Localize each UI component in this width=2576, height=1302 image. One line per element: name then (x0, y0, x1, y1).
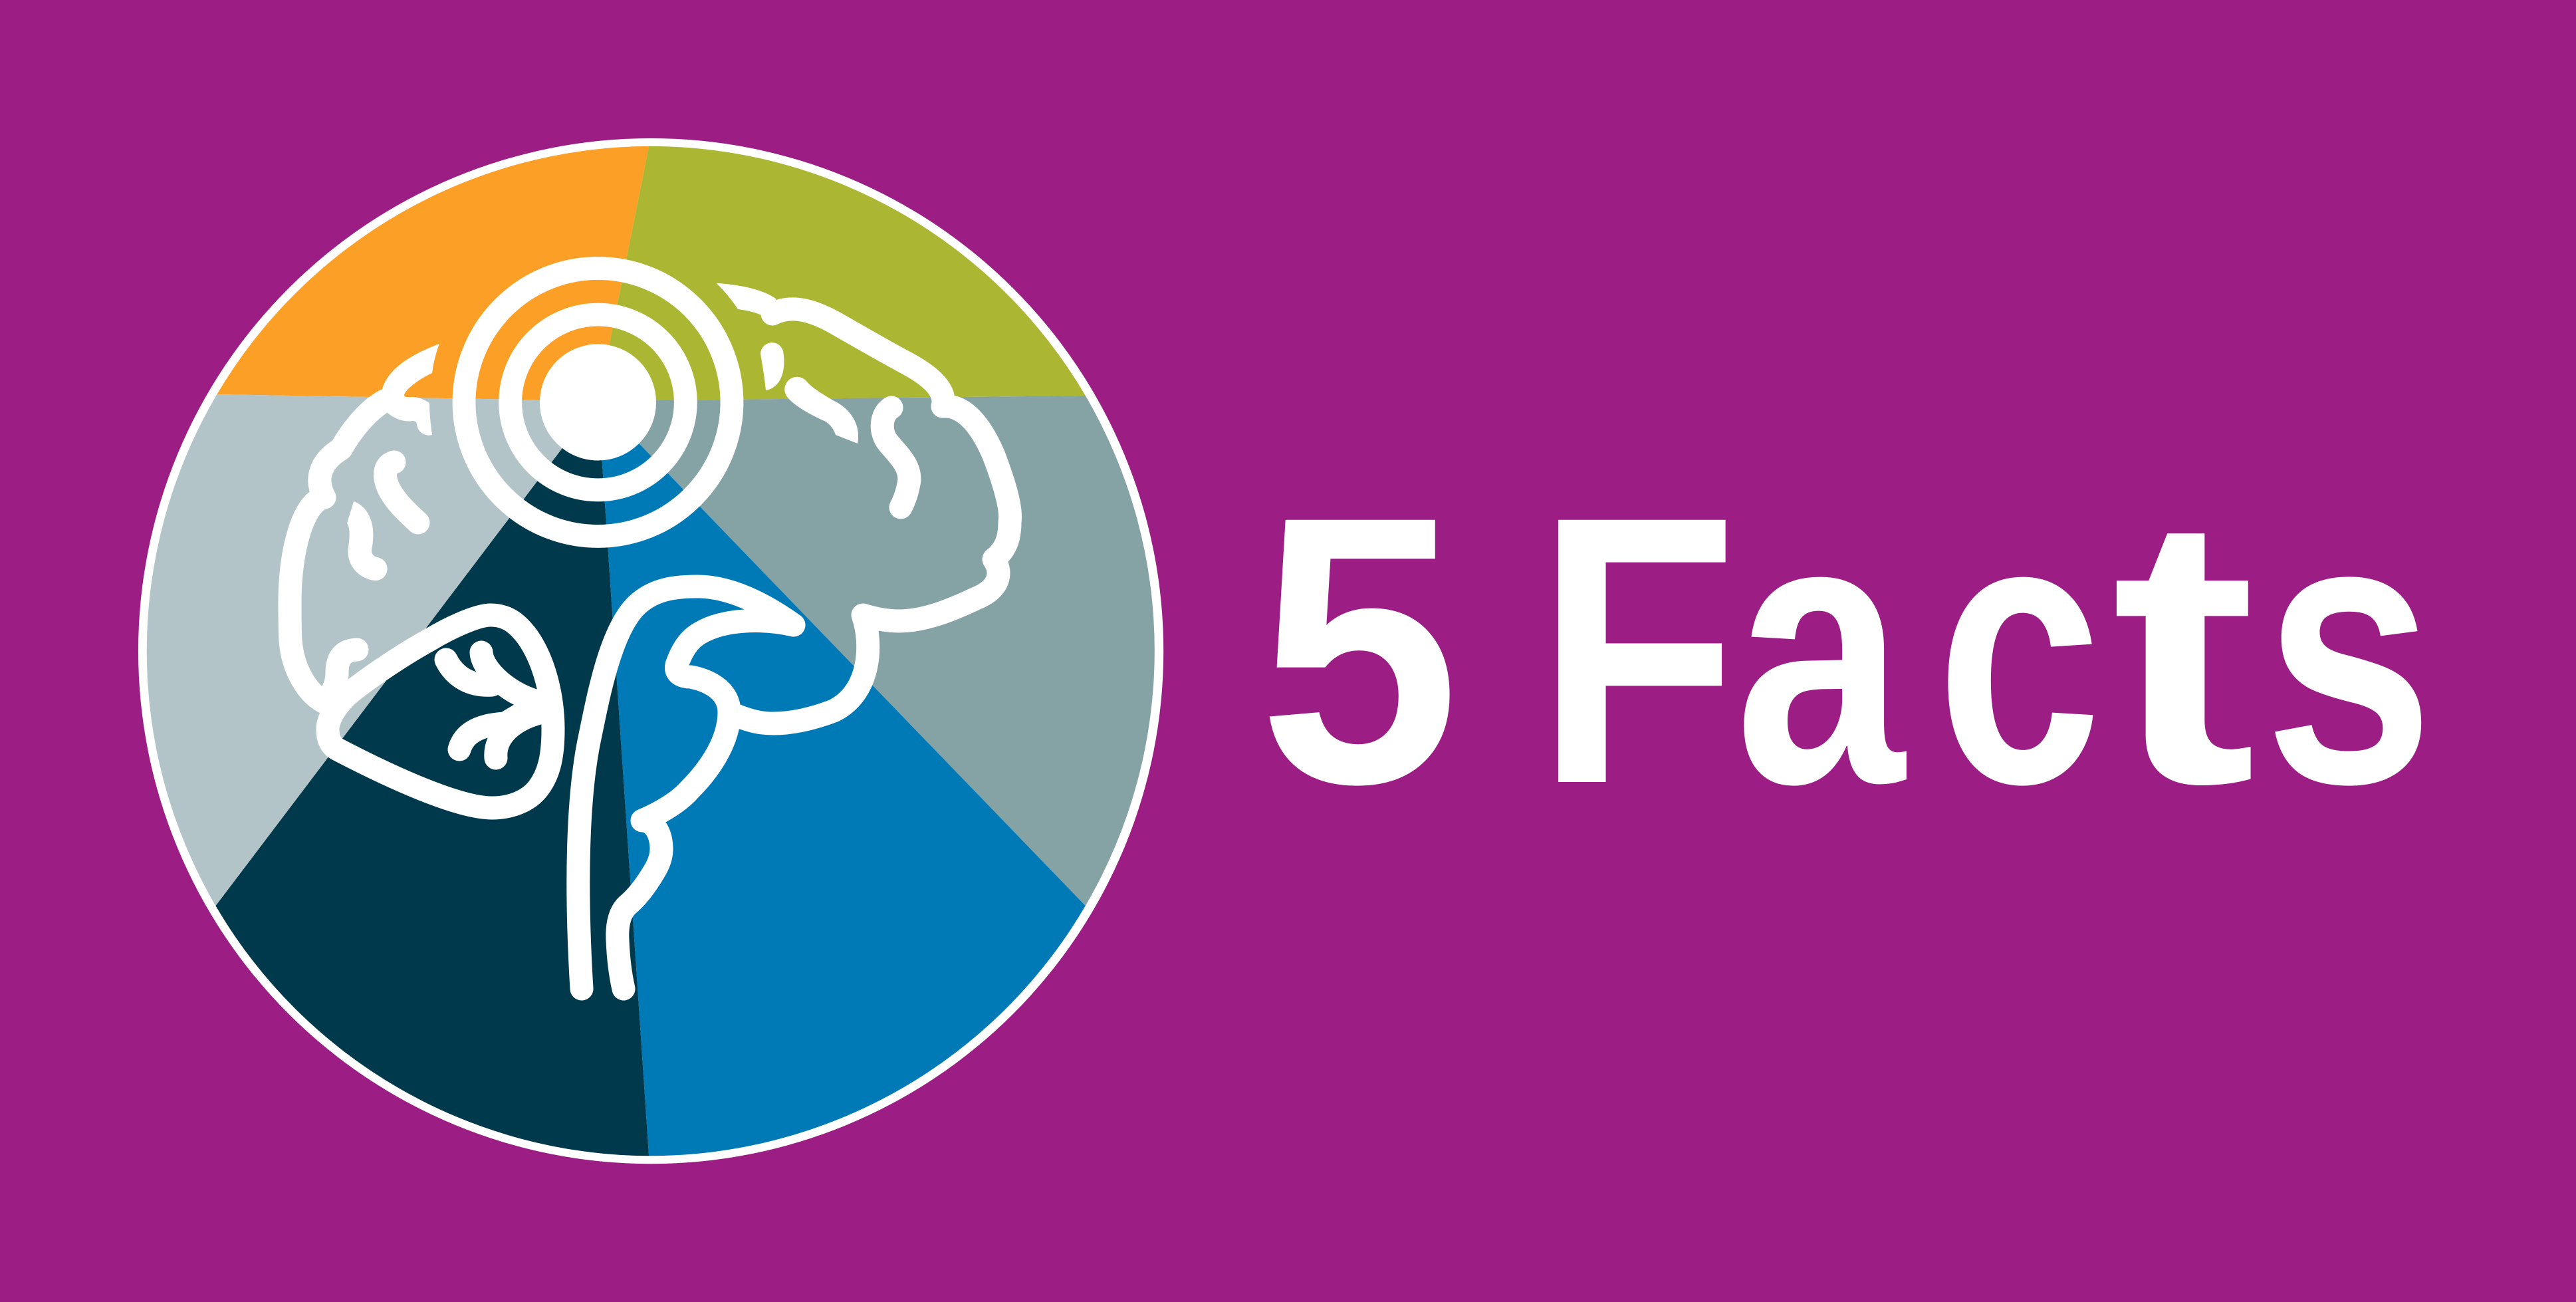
wedge: dark navy (215, 401, 649, 1156)
left inner curl (386, 462, 418, 523)
left head outline (290, 400, 386, 704)
left small tapered stroke (347, 501, 388, 581)
outer ring (464, 268, 732, 536)
upper left tapered stroke (382, 344, 439, 436)
right inner curl (882, 408, 909, 507)
upper right tapered stroke (717, 283, 778, 325)
title: 5 Facts: 5 (1258, 438, 1460, 863)
centre dot (540, 344, 656, 461)
inner ring (511, 315, 685, 490)
brain lobe outline (328, 615, 553, 808)
title: 5 Facts: F (1536, 437, 1738, 863)
crown of head outline (772, 309, 943, 406)
badge white border (138, 138, 1163, 1164)
badge segments (138, 138, 1163, 1164)
brain veins (446, 652, 545, 758)
title: 5 Facts: c (1936, 437, 2102, 863)
wedge: blue (598, 401, 1086, 1156)
title: 5 Facts: a (1735, 437, 1907, 862)
wedge: olive (598, 146, 1086, 401)
right small tapered stroke (761, 342, 784, 390)
circular badge (138, 138, 1163, 1164)
back of head outline (735, 406, 1010, 723)
icon: tapered hair and brain details (347, 283, 858, 581)
title: 5 Facts: s (2264, 437, 2434, 862)
wedge: orange (217, 146, 649, 401)
title: 5 Facts: t (2111, 438, 2256, 863)
title: 5 Facts (1258, 437, 2434, 863)
wedge: light grey (147, 394, 598, 906)
right curved tapered stroke (784, 377, 858, 444)
face profile outline (578, 586, 794, 989)
wedge: grey teal (598, 396, 1155, 906)
icon: target rings (464, 268, 732, 536)
icon: head with brain outline (290, 309, 1010, 989)
